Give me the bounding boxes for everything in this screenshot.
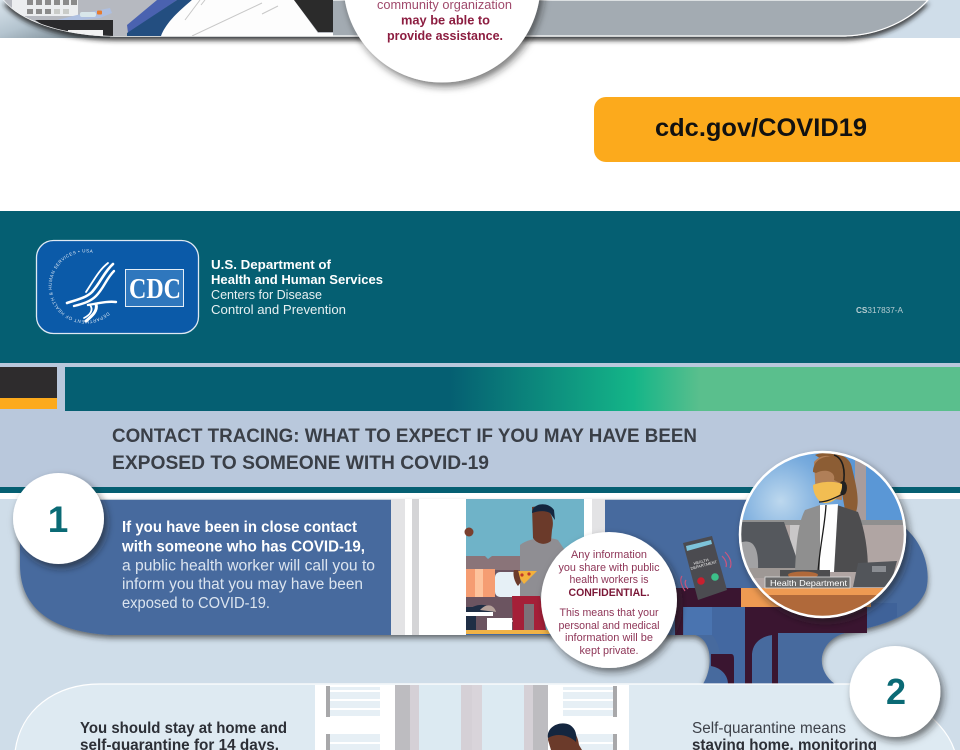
callout text: provide assistance. (387, 29, 503, 43)
step 1 text: with someone who has COVID-19, (121, 538, 365, 556)
gradient bar (65, 367, 960, 411)
CDC logo (36, 240, 200, 334)
title (112, 426, 697, 474)
callout circle: confidentiality: you share with public (558, 562, 660, 574)
callout circle: confidentiality: information will be (565, 632, 653, 644)
publication code: CS317837-A (856, 306, 904, 315)
callout circle: confidentiality: kept private. (580, 645, 638, 657)
agency name: U.S. Department of (211, 258, 332, 272)
CDC logo: CDC (129, 273, 181, 305)
number badge 2: 2 (886, 671, 906, 712)
header band: contact tracing title area (0, 363, 960, 487)
callout circle: confidentiality (541, 532, 677, 668)
step 2 right text (692, 720, 877, 750)
callout circle: confidentiality: personal and medical (558, 620, 660, 632)
callout circle: confidentiality: health workers is (570, 574, 649, 586)
agency name: Control and Prevention (211, 303, 346, 317)
agency name: Centers for Disease (211, 288, 322, 302)
panel: step 2 (15, 646, 955, 750)
step 2 right text: Self-quarantine means (692, 720, 846, 737)
phone: HEALTH (693, 557, 709, 566)
illustration: person at home with pizza (391, 499, 605, 635)
number badge 1 (13, 473, 104, 564)
footer band: HHS and CDC identity (0, 211, 960, 363)
phone (681, 536, 731, 600)
callout circle: confidentiality: CONFIDENTIAL. (568, 587, 650, 599)
illustration: desk with phone (660, 536, 897, 684)
callout text: may be able to (401, 14, 490, 28)
title: CONTACT TRACING: WHAT TO EXPECT IF YOU MAY HAVE BEEN (112, 426, 697, 447)
illustration: person at window (315, 685, 629, 750)
step 1 text (121, 519, 375, 612)
divider and background (0, 487, 960, 750)
callout circle: community assistance (344, 0, 540, 82)
callout circle: confidentiality: This means that your (560, 607, 659, 619)
step 1 text: inform you that you may have been (122, 576, 363, 593)
step 1 text: a public health worker will call you to (122, 558, 375, 574)
agency name (211, 258, 383, 317)
top section: previous panel remnant (0, 0, 960, 38)
circle: health department worker (739, 451, 906, 620)
phone: DEPARTMENT (690, 559, 718, 571)
illustration: desk scene fragment (0, 0, 333, 36)
CDC logo: DEPARTMENT OF HEALTH & HUMAN SERVICES • USA (48, 249, 110, 324)
callout circle: confidentiality: Any information (571, 549, 647, 561)
step 1 text: If you have been in close contact (122, 519, 357, 536)
pale panel shape (15, 684, 955, 750)
number badge 1: 1 (48, 499, 68, 540)
button: website link: cdc.gov/COVID19 (655, 114, 867, 142)
grey panel with curved corners (4, 0, 928, 36)
color block (0, 367, 57, 409)
blue panel shape (20, 500, 928, 684)
panel: step 1 (13, 451, 928, 684)
number badge 2 (850, 646, 940, 737)
step 1 text: exposed to COVID-19. (122, 595, 270, 612)
button: website link (594, 97, 960, 162)
step 2 left text (80, 720, 287, 750)
title: EXPOSED TO SOMEONE WITH COVID-19 (112, 453, 489, 474)
step 2 left text: You should stay at home and (80, 720, 287, 737)
callout text (377, 0, 512, 43)
agency name: Health and Human Services (211, 273, 383, 287)
circle: health department worker: Health Department (770, 578, 848, 588)
